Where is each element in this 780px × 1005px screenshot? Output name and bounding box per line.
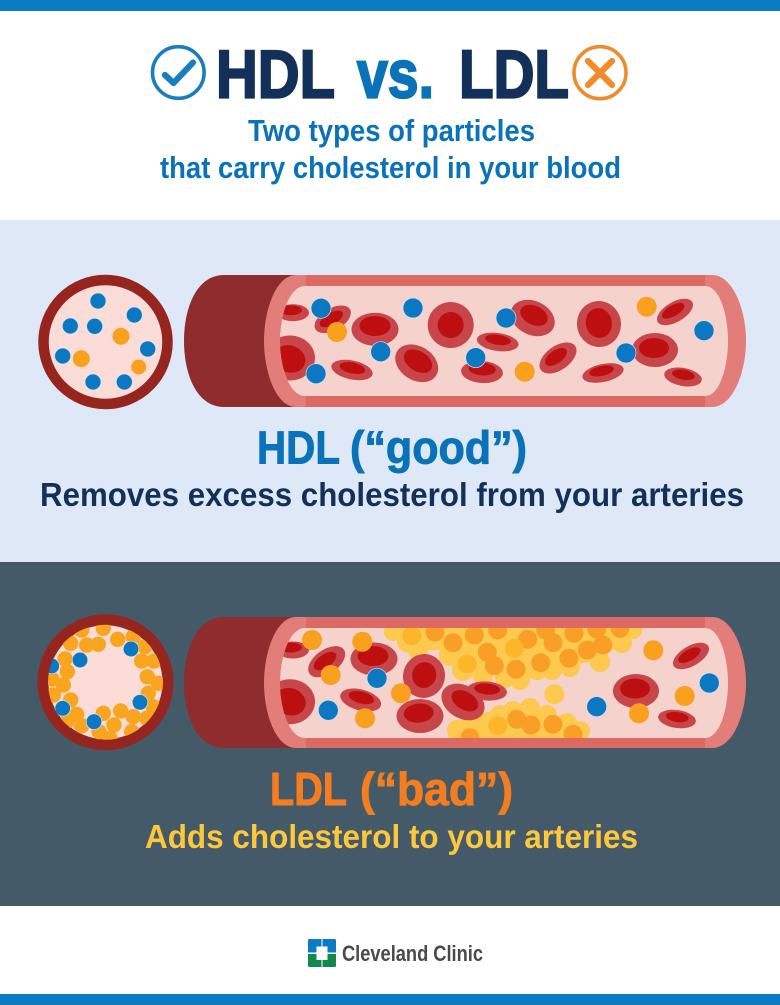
header [152, 36, 626, 185]
title: vs. [357, 36, 434, 112]
artery cross-section: HDL [44, 280, 168, 404]
heading: HDL good: (“good”) [350, 422, 527, 474]
heading: LDL bad: (“bad”) [360, 763, 513, 815]
red blood cells [265, 637, 713, 733]
heading: HDL good [257, 422, 527, 474]
heading: HDL good: HDL [257, 422, 340, 474]
title: LDL [459, 36, 569, 112]
logo: Cleveland Clinic: Cleveland Clinic [342, 941, 483, 966]
text: HDL description: Removes excess cholesterol from your arteries [40, 477, 744, 514]
subtitle: that carry cholesterol in your blood [160, 150, 621, 185]
subtitle [160, 113, 621, 185]
cholesterol plaque [384, 628, 642, 738]
icon: check mark [152, 47, 204, 98]
blood vessel: LDL [184, 617, 746, 748]
text: LDL description: Adds cholesterol to your arteries [145, 819, 638, 856]
subtitle: Two types of particles [248, 113, 535, 148]
panel: HDL [0, 220, 780, 562]
HDL and LDL particles [306, 297, 714, 384]
bottom bar [0, 994, 780, 1005]
logo: Cleveland Clinic [308, 939, 483, 967]
HDL and LDL particles [302, 630, 719, 728]
top bar [0, 0, 780, 11]
panel: LDL [0, 562, 780, 906]
title [216, 36, 569, 112]
blood vessel: HDL [184, 275, 746, 407]
heading: LDL bad [270, 763, 513, 815]
title: HDL [216, 36, 335, 112]
heading: LDL bad: LDL [270, 763, 347, 815]
icon: x mark [574, 47, 626, 99]
red blood cells [280, 298, 702, 386]
artery cross-section: LDL [43, 620, 168, 746]
